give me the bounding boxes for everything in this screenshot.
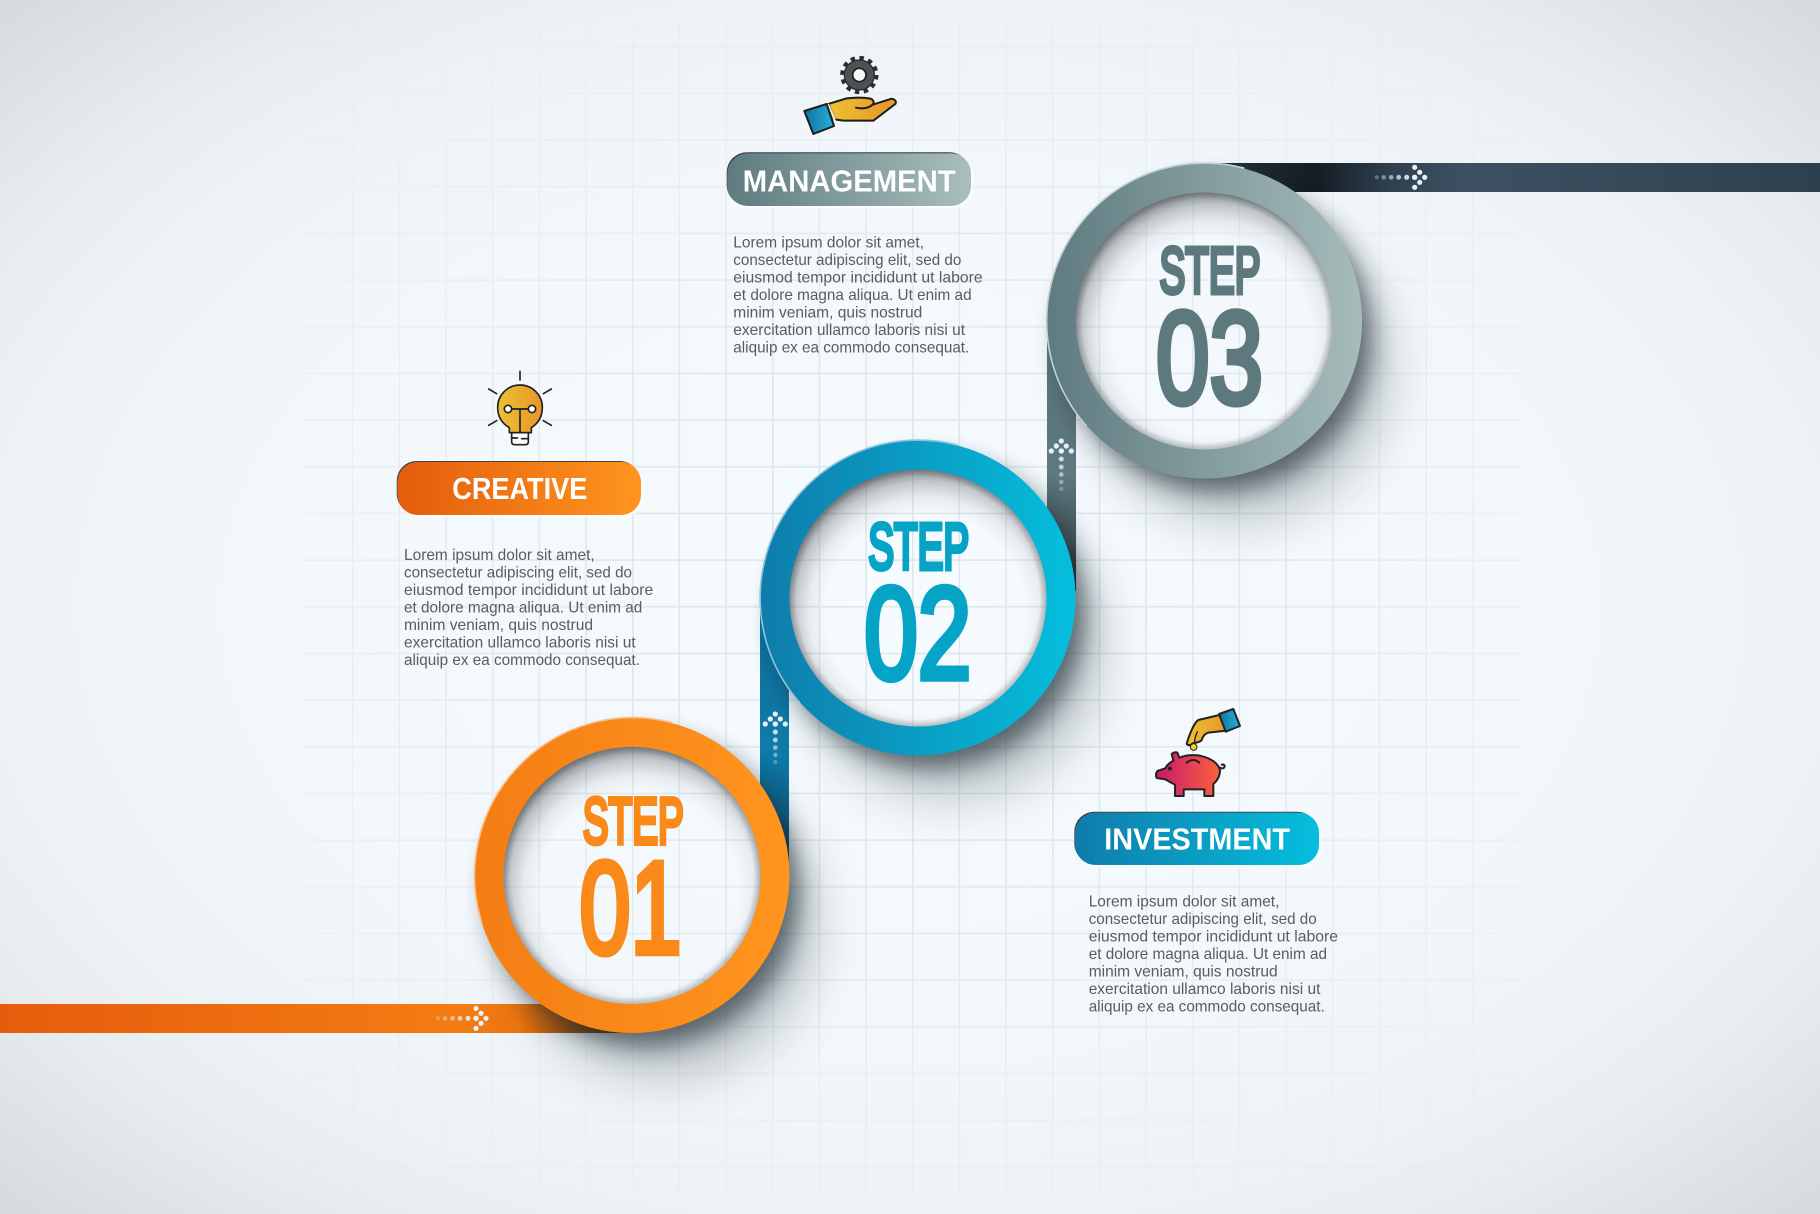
text block: investment: eiusmod tempor incididunt ut labore — [1089, 929, 1338, 946]
pill: investment: INVESTMENT — [1104, 821, 1290, 856]
pill: creative — [397, 461, 643, 516]
text block: management: minim veniam, quis nostrud — [733, 304, 922, 321]
step 1 number: 01 — [580, 834, 682, 981]
inner shadow — [503, 746, 761, 1004]
text block: investment — [1089, 894, 1338, 1016]
connector bar: top right — [1205, 163, 1820, 192]
pill: creative: CREATIVE — [452, 471, 587, 506]
text block: management: et dolore magna aliqua. Ut enim ad — [733, 287, 972, 304]
arrow: vertical dots step 1 to 2 — [763, 711, 788, 764]
sleeve — [804, 104, 834, 134]
text block: management: consectetur adipiscing elit, sed do — [733, 252, 961, 269]
text block: creative: eiusmod tempor incididunt ut labore — [404, 582, 653, 599]
step 3 circle — [1047, 163, 1386, 518]
text block: management: aliquip ex ea commodo consequat. — [733, 339, 969, 356]
socket — [512, 433, 528, 445]
bulb glass — [498, 385, 542, 433]
step 3 label: STEP — [1160, 235, 1260, 307]
hand — [1187, 715, 1227, 745]
connector bar: bottom left — [0, 1004, 632, 1033]
background grid — [304, 97, 1520, 1118]
icon: piggy bank with hand and coin — [1156, 709, 1240, 796]
text block: creative: aliquip ex ea commodo consequat. — [404, 652, 640, 669]
filament — [512, 409, 528, 432]
pill: management — [727, 152, 973, 208]
arrow: vertical dots step 2 to 3 — [1049, 438, 1074, 491]
ring — [1062, 178, 1348, 464]
text block: management: eiusmod tempor incididunt ut labore — [733, 269, 983, 286]
pig tail — [1219, 764, 1225, 768]
coin — [1190, 744, 1197, 750]
step 1 label: STEP — [583, 786, 684, 858]
arrow: bottom bar dots — [436, 1006, 489, 1031]
text block: investment: consectetur adipiscing elit, sed do — [1089, 911, 1317, 928]
ring — [775, 455, 1061, 741]
icon: hand holding gear — [804, 58, 896, 134]
step 2 label: STEP — [868, 511, 969, 583]
step 3 number: 03 — [1156, 284, 1263, 431]
inner shadow — [1076, 192, 1334, 450]
text block: creative: exercitation ullamco laboris nisi ut — [404, 634, 636, 652]
text block: management: Lorem ipsum dolor sit amet, — [733, 234, 924, 251]
text block: creative: Lorem ipsum dolor sit amet, — [404, 547, 595, 564]
text block: investment: exercitation ullamco laboris nisi ut — [1089, 981, 1321, 998]
text block: investment: et dolore magna aliqua. Ut enim ad — [1089, 946, 1327, 963]
text block: creative: minim veniam, quis nostrud — [404, 617, 593, 634]
text block: creative: et dolore magna aliqua. Ut enim ad — [404, 600, 642, 616]
text block: investment: Lorem ipsum dolor sit amet, — [1089, 894, 1279, 911]
cuff — [1219, 709, 1240, 732]
text block: management — [733, 234, 983, 356]
step 1 circle — [475, 718, 814, 1073]
icon: light bulb — [489, 371, 551, 445]
ring shadow — [489, 736, 814, 1073]
ring shadow — [1061, 181, 1386, 518]
rays — [489, 371, 551, 425]
ring — [489, 732, 775, 1018]
pill: management: MANAGEMENT — [743, 164, 956, 199]
step 2 number: 02 — [864, 560, 971, 706]
text block: management: exercitation ullamco laboris nisi ut — [733, 322, 966, 339]
arrow: top bar dots — [1375, 165, 1427, 190]
pill: investment — [1074, 812, 1321, 867]
step 2 circle — [760, 440, 1100, 795]
ring shadow — [775, 458, 1100, 795]
text block: investment: minim veniam, quis nostrud — [1089, 964, 1278, 981]
text block: creative: consectetur adipiscing elit, sed do — [404, 564, 632, 582]
connector bar: step 2 to step 3 — [1047, 321, 1076, 591]
inner shadow — [789, 469, 1047, 727]
connector bar: step 1 to step 2 — [760, 598, 789, 866]
hand — [828, 98, 896, 121]
text block: creative — [404, 547, 653, 669]
gear — [843, 58, 876, 92]
text block: investment: aliquip ex ea commodo consequat. — [1089, 999, 1325, 1016]
pig — [1156, 752, 1220, 796]
